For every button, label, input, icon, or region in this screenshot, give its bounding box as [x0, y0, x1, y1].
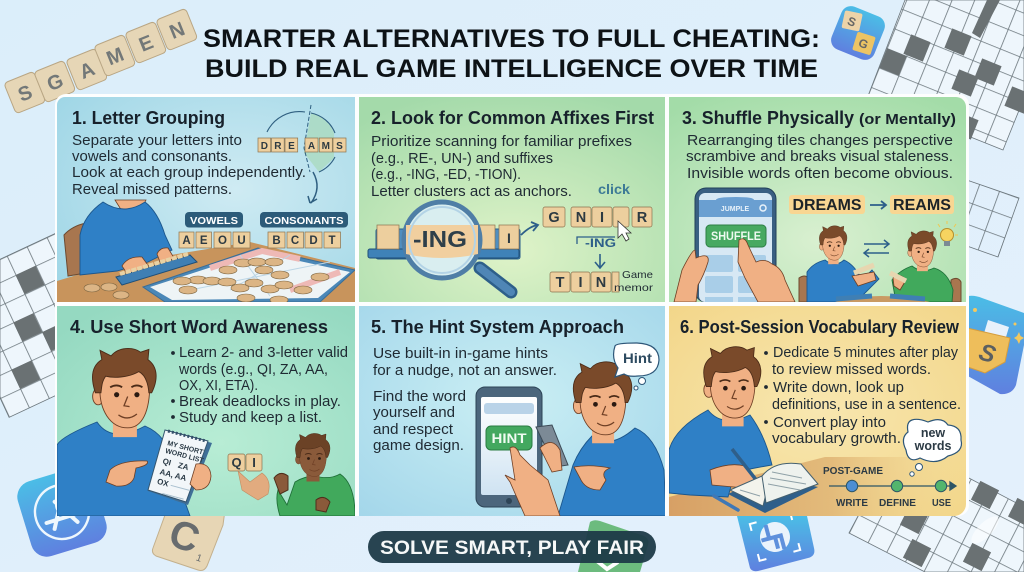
body 2: (e.g., RE-, UN-) and suffixes	[371, 151, 553, 167]
hint speech bubble: Hint	[623, 351, 653, 366]
heading 2: 2. Look for Common Affixes First	[371, 108, 654, 128]
small -ING label	[577, 236, 616, 268]
white panel backing	[55, 94, 969, 516]
body 6: Convert play into	[773, 415, 886, 431]
tiles: Q I: Q	[231, 455, 242, 470]
scattered tiles: S G A M E N: N	[167, 18, 188, 44]
heading 3: 3. Shuffle Physically	[682, 108, 854, 128]
person writing	[669, 347, 772, 497]
panel 3: shuffle	[669, 97, 966, 302]
scattered tiles: S G A M E N: M	[104, 44, 127, 70]
scrambled tiles: R	[637, 210, 648, 226]
icon: scan globe app	[737, 513, 814, 571]
body 4: Learn 2- and 3-letter valid	[179, 345, 348, 361]
body 2: (e.g., -ING, -ED, -TION).	[371, 167, 521, 183]
phone with hint button: HINT	[492, 431, 527, 446]
diagram: splitting DREAMS: R	[274, 141, 282, 152]
box: REAMS: REAMS	[893, 197, 951, 214]
body 1: Look at each group independently.	[72, 165, 306, 181]
pointing hand	[238, 471, 269, 500]
icon: letter C tile: 1	[194, 553, 204, 565]
icon: shield S app: S	[976, 339, 999, 369]
desk	[669, 457, 966, 516]
chair	[64, 223, 84, 277]
icon: SG app	[828, 3, 888, 63]
thought cloud: new words: new	[921, 426, 945, 440]
scrambled tiles: I	[600, 210, 604, 226]
magnifier with -ING: -ING	[413, 226, 467, 252]
scattered tiles: S G A M E N	[4, 8, 198, 114]
tiles: consonants: T	[328, 235, 336, 247]
post-game timeline: WRITE	[836, 497, 868, 509]
cursor	[618, 221, 631, 241]
heading 3	[682, 110, 956, 128]
arrow DREAMS to REAMS	[870, 201, 886, 209]
tile rack	[116, 254, 197, 285]
panel 6: vocabulary review	[669, 306, 966, 516]
label: game memory	[614, 271, 653, 291]
person: blue	[807, 226, 879, 302]
heading 5: 5. The Hint System Approach	[371, 317, 624, 337]
body 4: Study and keep a list.	[179, 410, 322, 426]
hand tapping hint	[505, 447, 560, 516]
body 5 bottom: and respect	[373, 422, 453, 438]
scrambled tiles: G	[548, 210, 560, 226]
tiles: vowels: U	[237, 235, 246, 247]
body 1: vowels and consonants.	[72, 149, 232, 165]
heading 3: (or Mentally)	[859, 111, 956, 128]
scattered tiles: S G A M E N: S	[15, 81, 36, 107]
body 5 top: Use built-in in-game hints	[373, 346, 548, 362]
body 4: words (e.g., QI, ZA, AA,	[178, 362, 328, 378]
title: SMARTER ALTERNATIVES TO FULL CHEATING:	[203, 25, 820, 53]
body 6: to review missed words.	[772, 362, 931, 378]
notebook: WORD LIST	[164, 448, 205, 465]
body 4	[171, 345, 348, 426]
crossword: left	[0, 231, 71, 417]
icon: shield S app	[965, 296, 1024, 394]
tiles: consonants	[268, 232, 340, 248]
body 6: definitions, use in a sentence.	[772, 397, 961, 413]
result tiles TIN: I	[578, 275, 583, 291]
icon: SG app: G	[856, 36, 870, 52]
pencil in hand	[732, 449, 757, 481]
tiles: vowels	[179, 232, 250, 248]
tiles: vowels: O	[218, 235, 227, 247]
notebook	[148, 430, 212, 505]
body 3: Rearranging tiles changes perspective	[687, 133, 953, 149]
label: consonants: CONSONANTS	[264, 215, 344, 227]
diagram: splitting DREAMS: S	[336, 141, 343, 152]
label: game memory: Game	[622, 269, 653, 281]
crossword: top right	[868, 0, 1024, 150]
pen on desk	[714, 496, 738, 510]
chairs	[799, 276, 961, 302]
table with racks	[835, 296, 930, 302]
person: green	[892, 231, 953, 302]
body 3	[686, 134, 952, 178]
magnifier with -ING	[404, 202, 511, 292]
notebook: QI	[162, 457, 172, 467]
panel 2: common affixes	[359, 97, 665, 302]
post-game timeline: DEFINE	[879, 497, 916, 509]
body 3: Invisible words often become obvious.	[687, 166, 953, 182]
person with list	[57, 348, 190, 516]
body 5 top	[373, 346, 557, 379]
notebook: ZA	[177, 461, 190, 472]
scattered tiles: S G A M E N: G	[44, 70, 67, 96]
phone with shuffle button	[695, 188, 776, 302]
scrambled tiles: N	[576, 210, 586, 226]
body 1: Separate your letters into	[72, 133, 242, 149]
scattered tiles: S G A M E N: E	[136, 31, 157, 57]
icon: SG app: S	[845, 14, 858, 30]
panel 4: short words	[57, 306, 355, 516]
phone with shuffle button: JUMPLE	[721, 206, 750, 213]
diagram: splitting DREAMS: D	[261, 141, 268, 152]
open book	[728, 463, 818, 513]
hands holding phone	[674, 239, 795, 302]
notebook: OX	[156, 477, 170, 489]
body 5 bottom	[373, 389, 466, 454]
body 6: Dedicate 5 minutes after play	[773, 345, 959, 361]
phone with shuffle button: SHUFFLE	[711, 231, 761, 243]
thought cloud: new words: words	[914, 439, 951, 453]
label: consonants	[260, 212, 348, 228]
icon: lightbulb	[938, 221, 958, 246]
body 6: Write down, look up	[773, 380, 904, 396]
icon: app store	[13, 463, 111, 561]
tiles: consonants: D	[309, 235, 318, 247]
icon: letter C tile: C	[163, 511, 205, 562]
post-game timeline	[823, 465, 956, 509]
crossword: bottom right	[849, 477, 1024, 572]
post-game timeline: USE	[932, 497, 951, 509]
tile rack: I	[507, 230, 511, 246]
title	[203, 25, 820, 83]
body 5 top: for a nudge, not an answer.	[373, 363, 557, 379]
body 1: Reveal missed patterns.	[72, 182, 232, 198]
post-game timeline: POST-GAME	[823, 465, 883, 477]
footer banner	[368, 531, 656, 563]
swap arrows	[864, 240, 889, 257]
tile rack	[368, 225, 520, 259]
body 2	[371, 134, 632, 200]
notebook: MY SHORT	[166, 440, 205, 457]
result tiles TIN: T	[556, 275, 565, 291]
heading 6: 6. Post-Session Vocabulary Review	[680, 317, 960, 337]
cheering friend	[274, 433, 355, 516]
person at rack	[80, 200, 174, 275]
tiles: vowels: A	[182, 235, 191, 247]
panel 5: hint system	[359, 306, 666, 516]
box: DREAMS: DREAMS	[792, 197, 862, 214]
tiles: consonants: C	[291, 235, 299, 247]
panel 1: letter grouping	[57, 97, 355, 304]
label: vowels	[185, 212, 243, 228]
game board	[84, 248, 355, 304]
body 5 bottom: game design.	[373, 438, 464, 454]
diagram: splitting DREAMS: M	[322, 141, 330, 152]
tiles: vowels: E	[200, 235, 208, 247]
body 2: Prioritize scanning for familiar prefixes	[371, 134, 632, 150]
table	[57, 242, 355, 302]
diagram: splitting DREAMS	[258, 105, 346, 203]
label: click: click	[598, 181, 630, 197]
tiles: Q I	[228, 454, 262, 471]
heading 1: 1. Letter Grouping	[72, 108, 225, 128]
tiles: Q I: I	[252, 455, 256, 470]
person with phone	[536, 362, 666, 516]
scattered tiles: S G A M E N: A	[77, 58, 98, 84]
phone with hint button	[476, 387, 542, 507]
footer banner: SOLVE SMART, PLAY FAIR	[380, 538, 644, 559]
scrambled tiles	[543, 207, 652, 227]
notebook: AA, AA	[159, 467, 188, 483]
body 2: Letter clusters act as anchors.	[371, 184, 572, 200]
body 6: vocabulary growth.	[772, 431, 901, 447]
body 4: Break deadlocks in play.	[179, 394, 341, 410]
thought cloud: new words	[903, 419, 961, 476]
body 4: OX, XI, ETA).	[179, 378, 258, 394]
result tiles TIN: N	[596, 275, 606, 291]
title: BUILD REAL GAME INTELLIGENCE OVER TIME	[205, 55, 818, 83]
body 1	[72, 133, 306, 198]
icon: green app	[578, 520, 648, 572]
icon: letter C tile	[152, 510, 225, 570]
label: game memory: memor	[614, 282, 654, 294]
body 5 bottom: yourself and	[373, 405, 455, 421]
crossword: right middle	[950, 177, 1019, 257]
hint speech bubble	[614, 343, 659, 390]
diagram: splitting DREAMS: E	[288, 141, 295, 152]
arrow to tiles	[521, 222, 538, 235]
body 3: scrambive and breaks visual staleness.	[686, 149, 953, 165]
body 6	[764, 345, 961, 447]
small -ING label: -ING	[585, 236, 616, 250]
tiles: consonants: B	[272, 235, 281, 247]
heading 4: 4. Use Short Word Awareness	[70, 317, 328, 337]
body 5 bottom: Find the word	[373, 389, 466, 405]
result tiles TIN	[550, 272, 619, 292]
diagram: splitting DREAMS: A	[308, 141, 315, 152]
tiles in hands	[854, 265, 906, 281]
label: vowels: VOWELS	[190, 215, 238, 227]
